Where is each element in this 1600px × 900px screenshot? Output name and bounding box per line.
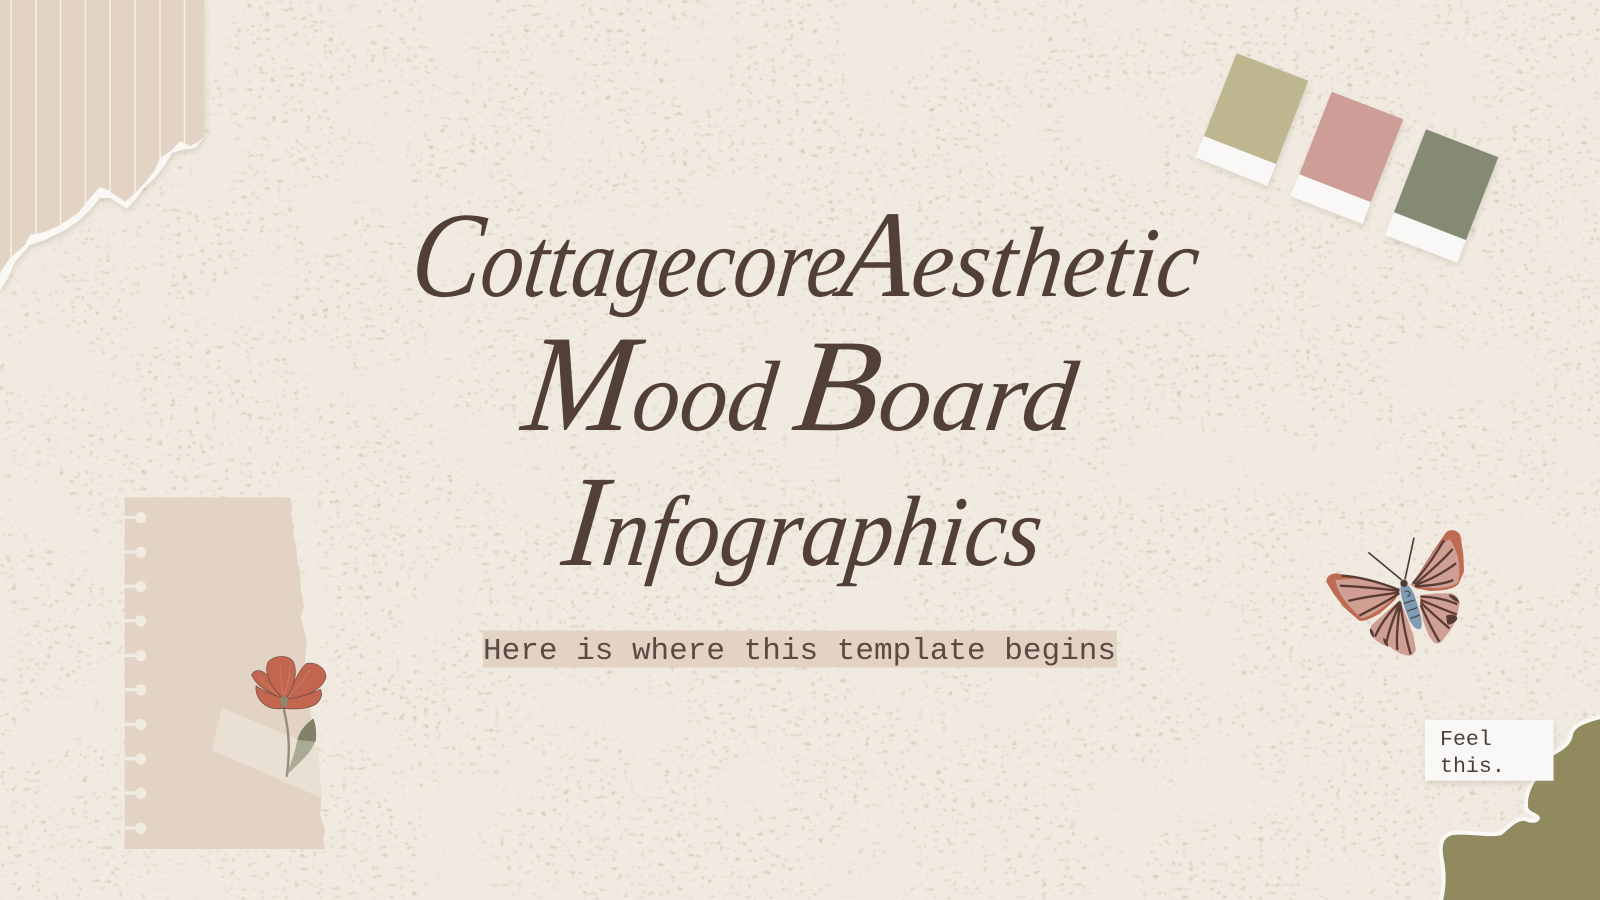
title line 1: Aesthetic	[828, 185, 1209, 323]
note: Feel this.: Feel	[1440, 728, 1492, 752]
torn striped paper, top left	[0, 0, 204, 290]
lower left wing	[1370, 600, 1416, 656]
colour swatches	[1195, 53, 1498, 263]
note: Feel this.: this.	[1440, 755, 1505, 779]
title line 2: Mood	[514, 307, 788, 460]
striped pink sheet	[0, 0, 204, 280]
title	[405, 185, 1209, 594]
swatch: olive	[1195, 53, 1308, 186]
torn white paper edge	[0, 0, 204, 290]
notebook page with flower	[125, 497, 326, 849]
icon: pressed flower	[252, 656, 326, 777]
subtitle with highlight: Here is where this template begins	[483, 634, 1116, 669]
title line 2: Board	[786, 312, 1087, 459]
upper left wing	[1326, 573, 1400, 621]
torn notebook sheet	[125, 497, 325, 849]
title line 2	[514, 307, 1087, 460]
olive torn blob, bottom right	[1442, 717, 1600, 900]
lower right wing	[1420, 593, 1459, 644]
upper right wing	[1411, 530, 1464, 591]
note: Feel this.	[1425, 720, 1554, 781]
swatch: sage	[1385, 129, 1498, 263]
title line 1: Cottagecore	[405, 188, 855, 323]
title line 1	[405, 185, 1209, 323]
antennae	[1368, 538, 1414, 580]
body	[1400, 584, 1422, 629]
icon: butterfly	[1326, 530, 1464, 656]
title line 3: Infographics	[556, 450, 1052, 594]
swatch: rose	[1290, 92, 1403, 224]
washi tape	[212, 708, 322, 798]
